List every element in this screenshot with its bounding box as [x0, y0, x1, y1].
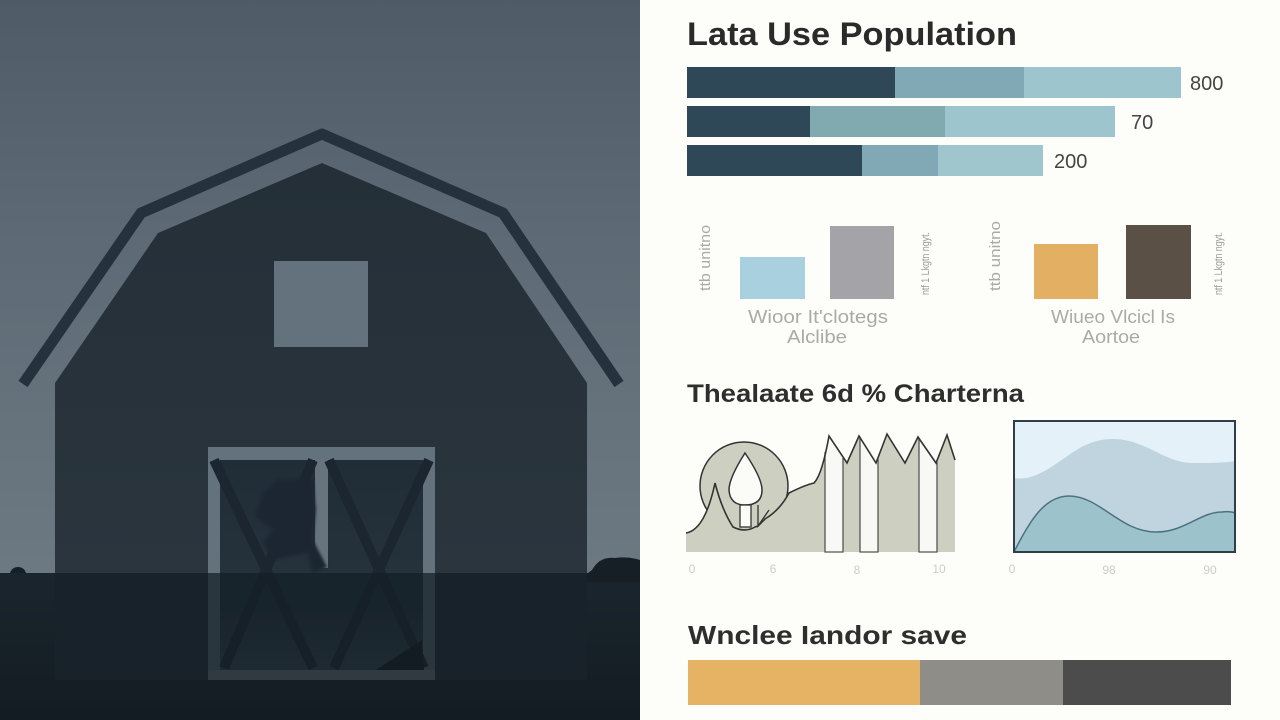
heading: landscape: Wnclee Iandor save — [688, 620, 967, 650]
barn door — [208, 447, 435, 680]
axis labels: 98 — [1102, 563, 1116, 577]
barn roof outline — [23, 134, 619, 384]
comparison chart left: ttb unitno — [697, 225, 714, 291]
axis labels: 90 — [1203, 563, 1217, 577]
back wave — [1014, 439, 1235, 552]
bar 800 — [687, 67, 1223, 98]
area chart with tree icon — [686, 434, 955, 577]
comparison chart left: Alclibe — [787, 327, 847, 347]
x axis labels: 0 — [689, 562, 696, 576]
comparison chart right: Wiueo Vlcicl Is — [1051, 307, 1175, 327]
segmented bar — [688, 660, 1231, 705]
ground field — [0, 573, 640, 720]
bar 200: 200 — [1054, 151, 1087, 173]
white columns — [825, 436, 937, 552]
centre post — [315, 460, 328, 568]
bar 70 — [687, 106, 1153, 137]
panel: data column — [640, 0, 1280, 720]
comparison chart left — [697, 225, 932, 347]
bar 70: 70 — [1131, 112, 1153, 134]
horse silhouette — [255, 478, 327, 573]
loft window — [274, 261, 368, 347]
axis labels: 0 — [1009, 562, 1016, 576]
bar 800: 800 — [1190, 73, 1223, 95]
comparison chart right — [987, 221, 1225, 347]
comparison chart right: ntf 1 Lkgtn ngyt. — [1213, 232, 1225, 295]
comparison chart left: Wioor It'clotegs — [748, 307, 888, 327]
x axis labels — [689, 562, 946, 577]
door shadow below horizon — [208, 573, 435, 680]
panel: barn illustration — [0, 0, 640, 720]
terrain outline — [686, 434, 955, 533]
barn body — [55, 163, 587, 573]
icon: circle behind tree — [700, 442, 788, 530]
x axis labels: 8 — [854, 563, 861, 577]
distant trees — [0, 557, 640, 582]
icon: tree — [729, 453, 769, 527]
barn lower shadow — [55, 573, 587, 680]
wave area chart — [1009, 421, 1235, 577]
x axis labels: 10 — [932, 562, 946, 576]
front wave — [1014, 496, 1235, 552]
heading: population: Lata Use Population — [687, 16, 1017, 52]
terrain area — [686, 434, 955, 552]
bar 200 — [687, 145, 1087, 176]
axis labels — [1009, 562, 1217, 577]
column outlines — [825, 437, 937, 552]
comparison chart left: ntf 1 Lkgtn ngyt. — [920, 232, 932, 295]
x axis labels: 6 — [770, 562, 777, 576]
heading: charts: Thealaate 6d % Charterna — [687, 380, 1025, 408]
comparison chart right: Aortoe — [1082, 327, 1140, 347]
door cross braces — [214, 460, 429, 668]
comparison chart right: ttb unitno — [987, 221, 1004, 291]
door bottom rail — [208, 670, 435, 680]
door bottom wedge — [376, 640, 424, 670]
stacked bar chart — [687, 67, 1223, 176]
